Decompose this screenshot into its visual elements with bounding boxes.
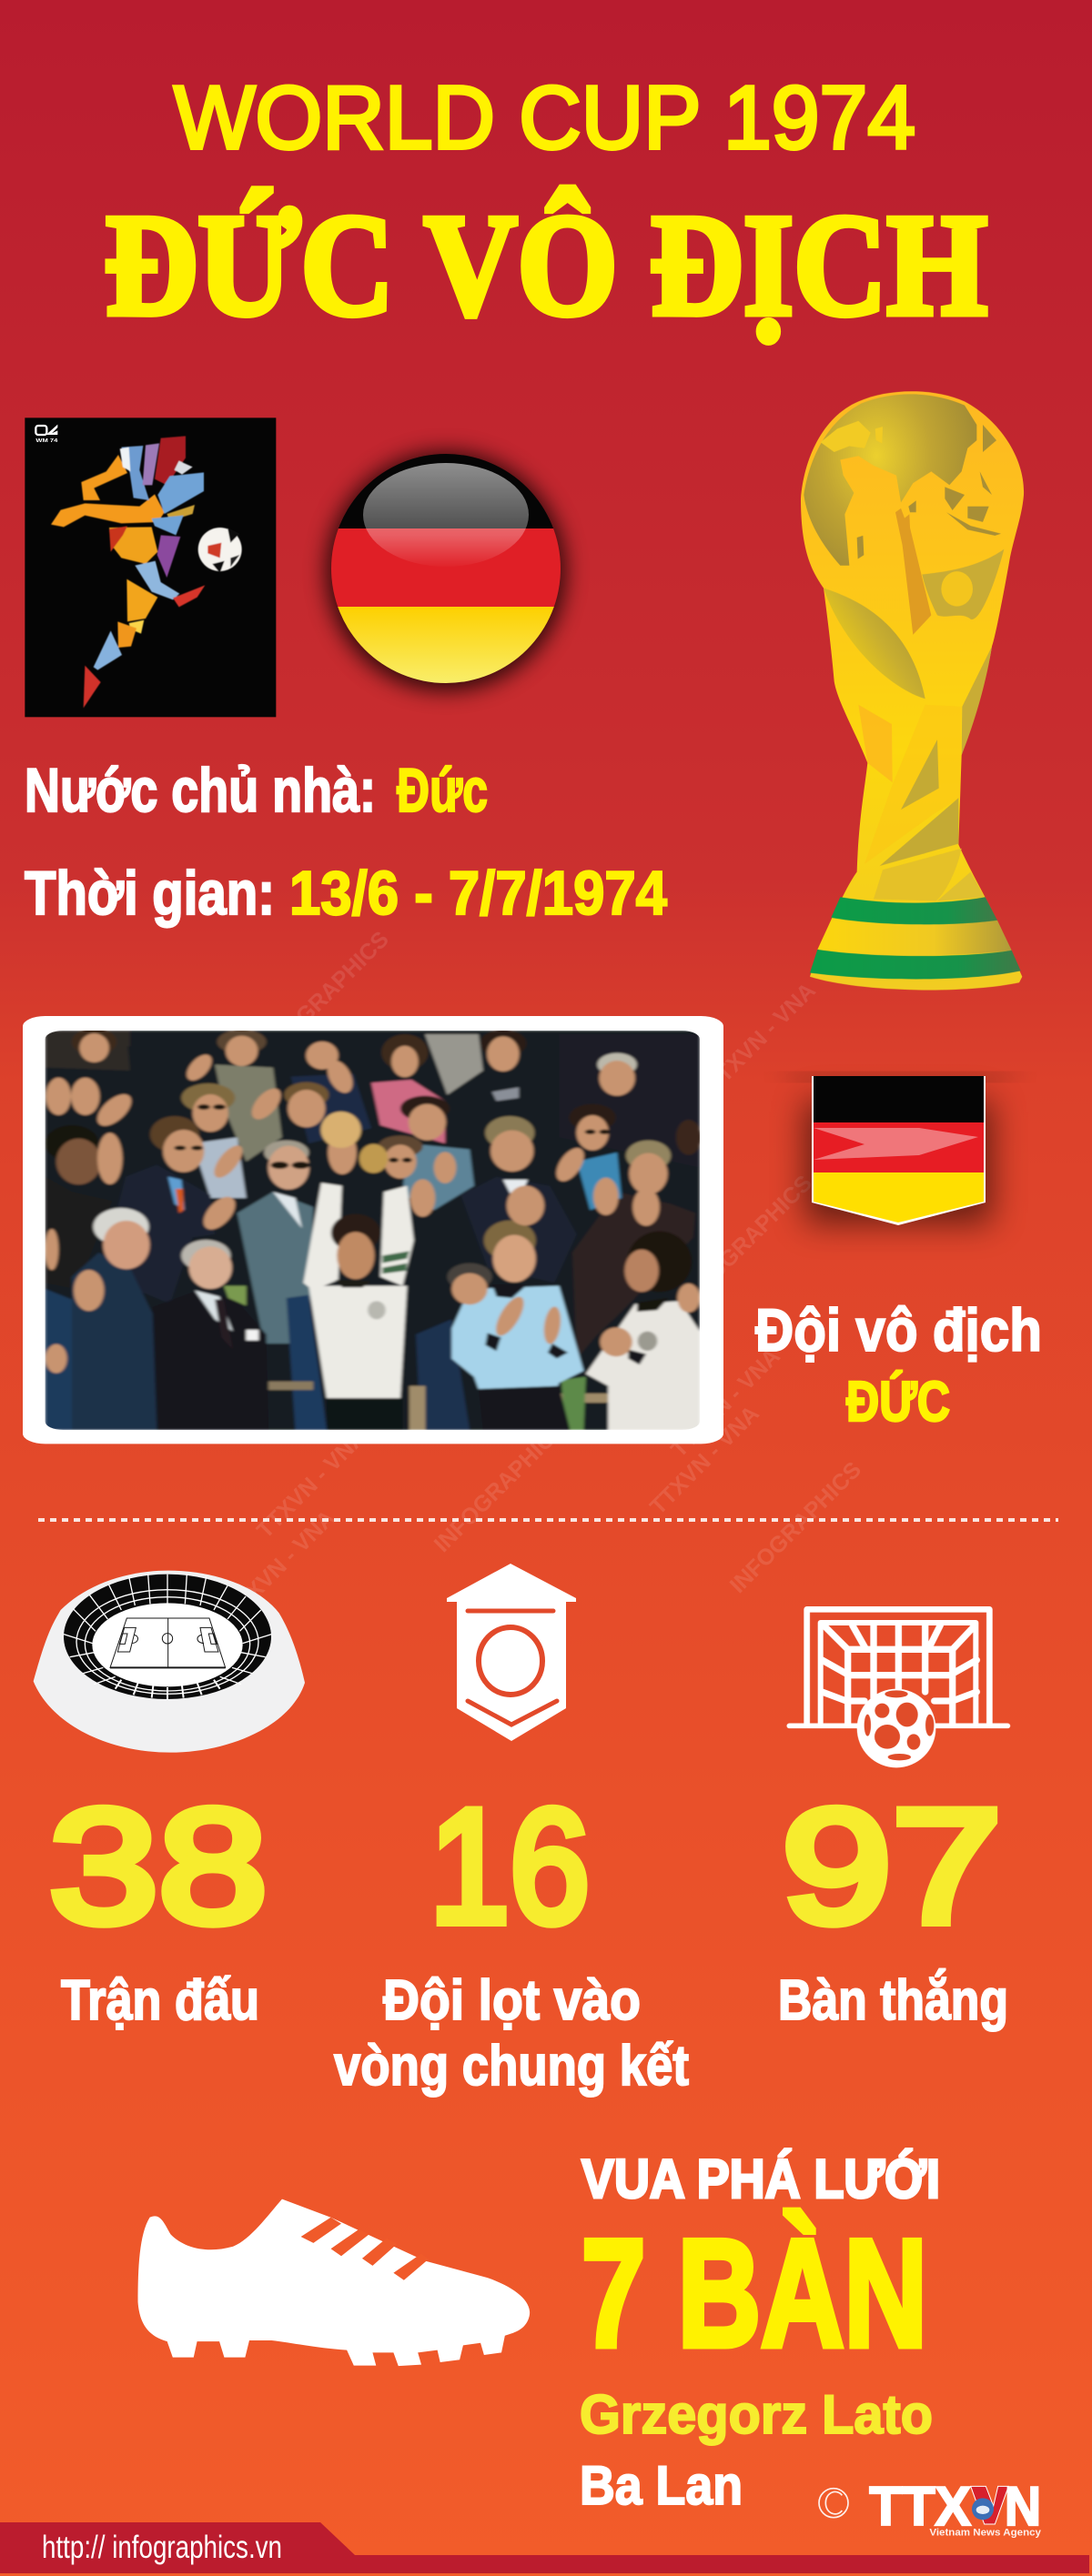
stat: matches: 38 [49,1776,268,1957]
text: tournament dates: Thời gian: [25,859,275,928]
logo: TTXVN copyright: Vietnam News Agency [929,2527,1041,2538]
footer band [0,2522,1089,2573]
text: host country: Nước chủ nhà: [25,756,376,825]
stat: goals: 97 [782,1776,1002,1957]
icon: World Cup trophy [801,391,1025,991]
icon: stadium [33,1570,305,1753]
icon: German shield flag [774,1073,1028,1227]
text: top scorer [580,2148,940,2516]
watermarks: INFOGRAPHICS [430,1416,571,1557]
text: top scorer: 7 BÀN [581,2208,927,2379]
photo: Germany captain lifting the trophy [23,1016,723,1444]
text: champion team [755,1296,1042,1434]
stat: finalists: 16 [430,1776,590,1957]
stat: matches [49,1776,268,2032]
watermarks: INFOGRAPHICS [725,1457,866,1598]
text: champion team: ĐỨC [846,1371,950,1434]
stat: goals [778,1776,1008,2032]
watermarks: TTXVN - VNA [645,1401,764,1520]
watermarks: INFOGRAPHICS [253,927,394,1068]
text: top scorer: Ba Lan [580,2455,743,2516]
stat: goals: Bàn thắng [778,1969,1008,2032]
title: World Cup 1974: WORLD CUP 1974 [174,67,915,167]
watermarks: TTXVN - VNA [702,978,821,1097]
text: top scorer: VUA PHÁ LƯỚI [581,2148,940,2209]
icon: pennant [447,1564,576,1741]
poster: World Cup 1974 footballer: WM 74 [35,438,58,444]
icon: football boot [138,2199,530,2367]
watermarks: TTXVN - VNA [221,1505,340,1625]
stat: finalists: vòng chung kết [334,2035,689,2098]
logo: TTXVN copyright: TTX [869,2476,971,2537]
logo: TTXVN copyright [818,2476,1041,2538]
footer url: http:// infographics.vn [42,2530,282,2565]
text: tournament dates: 13/6 - 7/7/1974 [289,859,667,928]
text: tournament dates [25,859,667,928]
poster: World Cup 1974 footballer [25,418,277,717]
text: champion team: Đội vô địch [755,1296,1042,1363]
icon: round German flag [326,451,566,691]
text: top scorer: Grzegorz Lato [580,2384,933,2445]
watermarks: TTXVN - VNA [666,1343,785,1463]
stat: finalists [334,1776,689,2098]
text: host country: Đức [397,756,488,825]
watermarks: TTXVN - VNA [252,1424,371,1544]
icon: goal with ball [786,1606,1010,1768]
watermarks: INFOGRAPHICS [676,1171,817,1312]
title: Đức vô địch: ĐỨC VÔ ĐỊCH [105,184,987,346]
stat: matches: Trận đấu [61,1969,259,2032]
watermarks [221,927,866,1625]
stat: finalists: Đội lọt vào [383,1969,641,2032]
